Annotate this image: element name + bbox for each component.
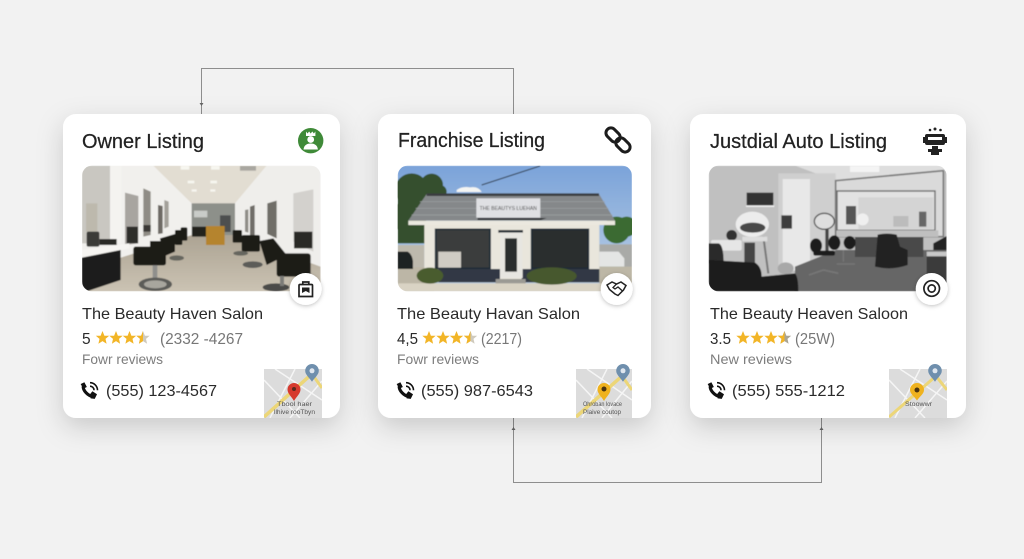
photo: black and white salon — [709, 166, 947, 291]
heading: franchise listing: Franchise Listing — [398, 130, 545, 152]
icon: star rating — [736, 331, 791, 344]
heading: owner listing: Owner Listing — [82, 131, 204, 153]
icon: camera lens badge — [916, 273, 948, 305]
rating row: 4,5 — [397, 331, 418, 348]
phone number: (555) 123-4567 — [106, 383, 217, 400]
rating row — [82, 331, 243, 348]
map thumbnail with pin: Plaive coutop — [583, 410, 622, 416]
icon: handshake badge — [601, 273, 633, 305]
heading: justdial auto listing: Justdial Auto Listing — [710, 131, 887, 153]
icon: phone — [397, 383, 414, 398]
review label: Fowr reviews — [397, 352, 479, 367]
rating row: (2217) — [481, 331, 522, 348]
connector: franchise to auto listing (bottom) — [512, 418, 824, 482]
rating row: 5 — [82, 331, 91, 348]
icon: storefront bag badge — [290, 273, 322, 305]
connector: owner to franchise (top) — [200, 68, 514, 114]
map thumbnail with pin: llhive rooTbyn — [274, 410, 315, 416]
rating row — [397, 331, 522, 348]
rating row — [710, 331, 835, 348]
business name: The Beauty Haven Salon — [82, 306, 263, 323]
icon: chain link — [604, 126, 632, 154]
icon: robot — [923, 128, 947, 155]
icon: star rating — [422, 331, 477, 344]
photo: salon interior — [82, 166, 321, 291]
business name: The Beauty Heaven Saloon — [710, 306, 908, 323]
map thumbnail with pin — [576, 364, 632, 418]
rating row: (25W) — [795, 331, 835, 348]
icon: phone — [81, 383, 98, 398]
map thumbnail with pin — [889, 364, 947, 418]
photo: salon storefront — [392, 166, 637, 291]
icon: star rating — [96, 331, 150, 344]
map thumbnail with pin: Tbool haer — [277, 402, 312, 408]
icon: phone — [708, 383, 724, 398]
panel: franchise listing — [378, 114, 651, 418]
phone number: (555) 987-6543 — [421, 383, 533, 400]
rating row: (2332 -4267 — [160, 331, 243, 348]
review label: Fowr reviews — [82, 352, 163, 367]
panel: justdial auto listing — [690, 114, 966, 418]
business name: The Beauty Havan Salon — [397, 306, 580, 323]
map thumbnail with pin: Ohroban lovace — [583, 402, 623, 408]
photo: salon storefront: THE BEAUTYS LUEHAN — [480, 206, 537, 212]
panel: owner listing — [63, 114, 340, 418]
rating row: 3.5 — [710, 331, 731, 348]
map thumbnail with pin — [264, 364, 322, 418]
icon: owner crown badge — [298, 128, 323, 153]
map thumbnail with pin: Stoowwr — [905, 402, 932, 408]
review label: New reviews — [710, 352, 792, 367]
phone number: (555) 555-1212 — [732, 383, 845, 400]
